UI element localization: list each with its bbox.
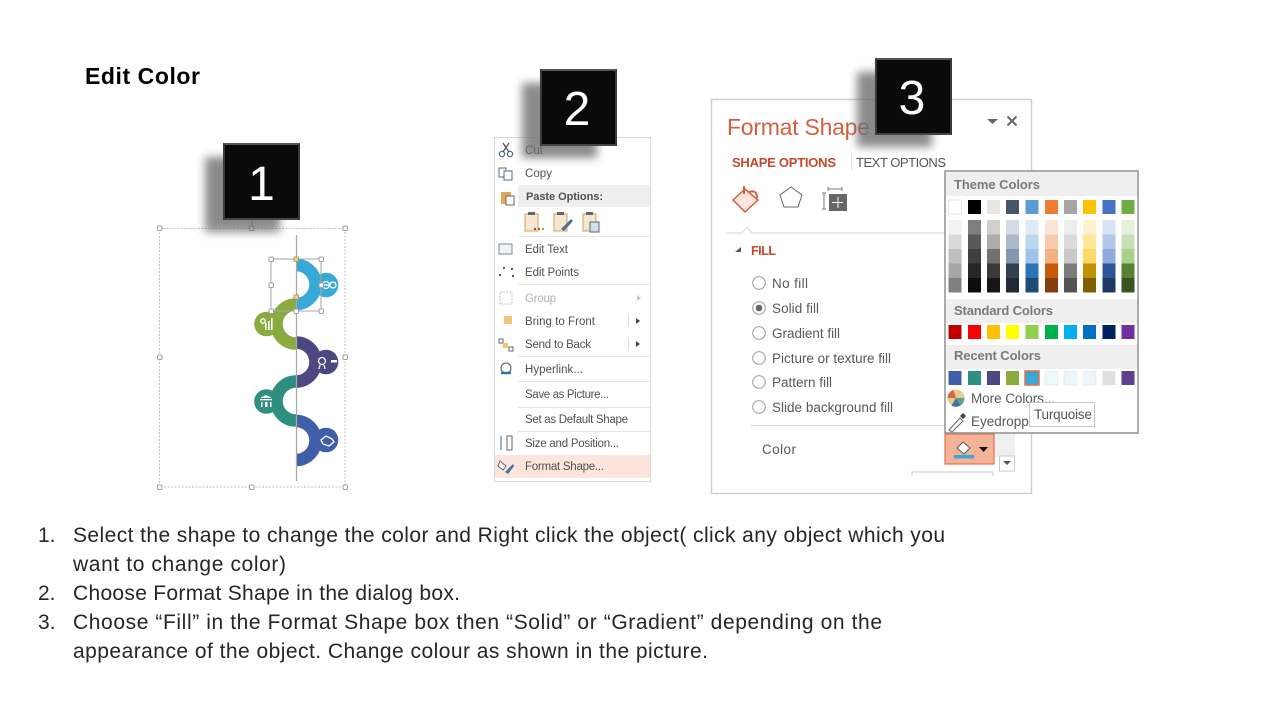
panel: step 3 format shape pane [712, 100, 1138, 494]
eyedropper item: Eyedropper [971, 414, 1041, 429]
colour picker popup [945, 171, 1138, 433]
menu labels [525, 145, 628, 473]
pane tabs [732, 153, 946, 170]
menu labels: Paste Options: [526, 191, 603, 203]
radio options: Slide background fill [772, 400, 893, 415]
menu labels: Hyperlink... [525, 364, 583, 376]
menu icons [498, 143, 599, 474]
menu labels: Cut [525, 145, 544, 157]
panel: step 2 context menu [494, 138, 650, 482]
menu labels: Edit Text [525, 244, 569, 256]
standard colours row [948, 325, 1134, 339]
popup headings: Recent Colors [954, 348, 1041, 363]
menu background [494, 138, 650, 482]
number badge 3 [857, 58, 952, 147]
menu labels: Set as Default Shape [525, 414, 628, 426]
submenu arrows [636, 295, 641, 347]
instructions list: 2. [38, 582, 56, 605]
radio options: Gradient fill [772, 326, 840, 341]
number badge 1 [205, 143, 300, 232]
selection box [158, 220, 348, 490]
pane tabs: SHAPE OPTIONS [732, 155, 836, 170]
color button [912, 433, 1015, 476]
tooltip: Turquoise [1034, 407, 1092, 422]
radio options: Pattern fill [772, 375, 832, 390]
menu labels: Save as Picture... [525, 389, 609, 401]
pane background [712, 100, 1032, 494]
paste options highlight [518, 185, 650, 207]
icon nodes [254, 273, 338, 452]
pane tabs: TEXT OPTIONS [856, 155, 946, 170]
eyedropper item [949, 413, 1041, 432]
recent colours row [948, 371, 1134, 385]
theme shades grid [948, 220, 1134, 292]
popup section bars [946, 172, 1137, 369]
pane title: Format Shape [727, 114, 870, 140]
radio options [753, 276, 893, 415]
color label: Color [762, 442, 796, 457]
number badge 2 [522, 69, 617, 158]
timeline curve [276, 265, 316, 460]
fill heading [735, 244, 776, 258]
menu labels: Size and Position... [525, 438, 619, 450]
axis line [296, 235, 298, 481]
theme colour row [948, 200, 1134, 214]
number badge 3: 3 [899, 72, 925, 125]
instructions list: appearance of the object. Change colour as shown in the picture. [73, 640, 708, 663]
menu labels: Edit Points [525, 267, 579, 279]
color row divider [751, 424, 945, 426]
instructions list: Choose Format Shape in the dialog box. [73, 582, 460, 605]
inner selection box [269, 257, 324, 314]
popup headings: Theme Colors [954, 177, 1040, 192]
menu labels: Copy [525, 168, 552, 180]
format shape highlight [495, 455, 650, 478]
more colours item [948, 390, 1055, 407]
popup headings: Standard Colors [954, 303, 1053, 318]
popup headings [954, 177, 1053, 363]
instructions list: Choose “Fill” in the Format Shape box then “Solid” or “Gradient” depending on the [73, 611, 882, 634]
menu separators [518, 236, 650, 432]
radio options: Picture or texture fill [772, 351, 891, 366]
fill heading: FILL [751, 244, 776, 258]
title: Edit Color [85, 63, 200, 89]
section divider [726, 227, 945, 233]
number badge 1: 1 [248, 158, 275, 211]
tooltip [1030, 402, 1094, 426]
number badge 2: 2 [564, 83, 590, 136]
pane controls [987, 116, 1016, 126]
menu labels: Group [525, 293, 556, 305]
instructions list: 1. [38, 524, 56, 547]
instructions list: 3. [38, 611, 56, 634]
tab icons [733, 186, 847, 212]
more colours item: More Colors... [971, 391, 1055, 406]
menu labels: Send to Back [525, 339, 591, 351]
popup background [945, 171, 1138, 433]
instructions list [38, 524, 945, 663]
radio options: No fill [772, 276, 808, 291]
menu labels: Bring to Front [525, 316, 596, 328]
panel: step 1 selected timeline shape [158, 220, 348, 490]
instructions list: Select the shape to change the color and Right click the object( click any object which you [73, 524, 945, 547]
radio options: Solid fill [772, 301, 819, 316]
menu labels: Format Shape... [525, 461, 604, 473]
instructions list: want to change color) [72, 553, 286, 576]
